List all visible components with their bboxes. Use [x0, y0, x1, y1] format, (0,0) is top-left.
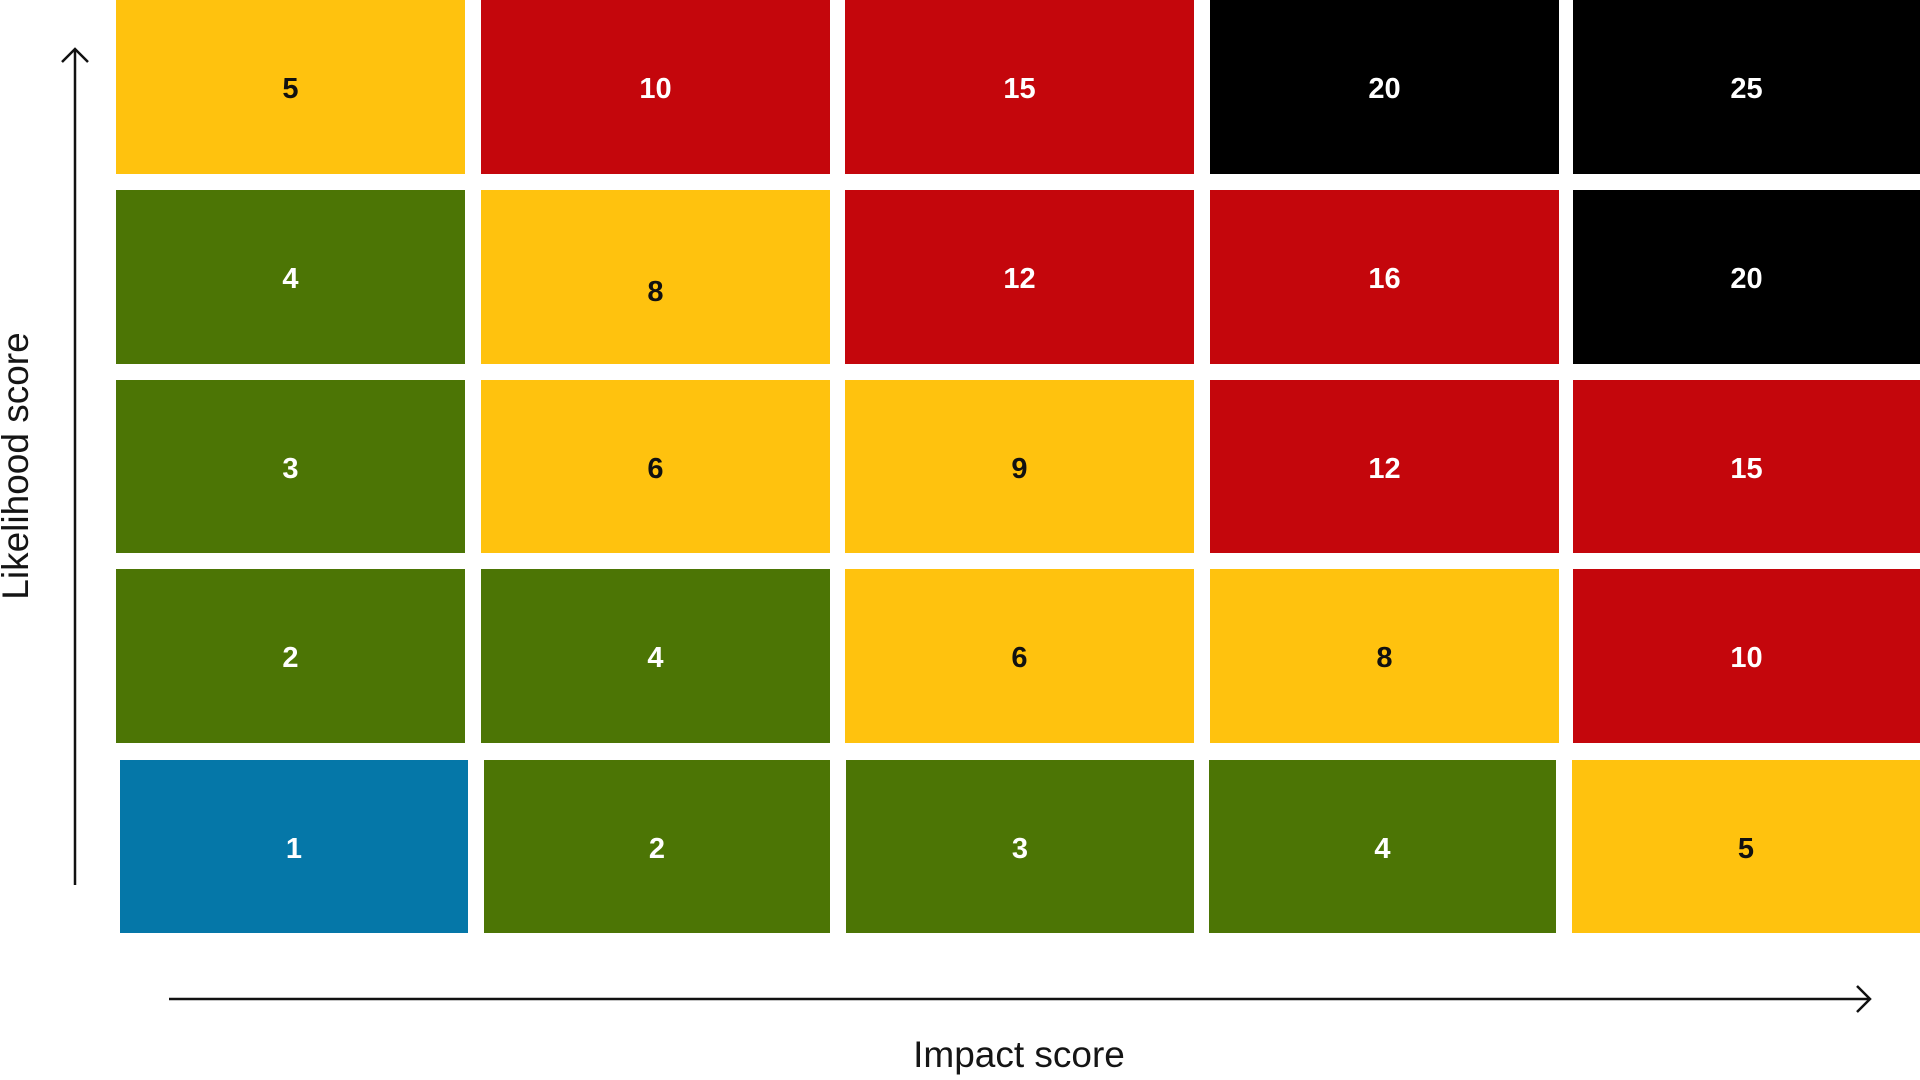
cell r1c4: 4 [1374, 832, 1391, 864]
cell r2c5 [1573, 569, 1920, 743]
cell r4c1 [116, 190, 465, 364]
cell r3c1: 3 [282, 452, 299, 484]
label: impact score: Impact score [913, 1034, 1125, 1075]
cell r1c2 [484, 760, 830, 933]
cell r3c4 [1210, 380, 1559, 553]
cell r2c3: 6 [1011, 642, 1028, 674]
cell r5c1: 5 [282, 73, 299, 105]
cell r4c3: 12 [1003, 263, 1036, 295]
cell r2c1: 2 [282, 642, 299, 674]
cell r4c3 [845, 190, 1194, 364]
cell r3c1 [116, 380, 465, 553]
cell r1c3 [846, 760, 1194, 933]
arrow: likelihood axis [61, 47, 89, 885]
cell r5c5: 25 [1730, 73, 1763, 105]
cell r1c5: 5 [1738, 832, 1754, 864]
cell r5c3 [845, 0, 1194, 174]
cell r2c2: 4 [647, 642, 664, 674]
cell r2c1 [116, 569, 465, 743]
cell r3c5 [1573, 380, 1920, 553]
arrow: impact axis [169, 985, 1872, 1013]
cell r4c5 [1573, 190, 1920, 364]
cell r5c4 [1210, 0, 1559, 174]
cell r2c5: 10 [1730, 642, 1763, 674]
cell r5c4: 20 [1368, 73, 1401, 105]
cell r3c3: 9 [1011, 452, 1028, 484]
cell r4c1: 4 [282, 263, 299, 295]
cell r5c1 [116, 0, 465, 174]
cell r4c4 [1210, 190, 1559, 364]
cell r3c5: 15 [1730, 452, 1763, 484]
cell r1c3: 3 [1012, 832, 1028, 864]
cell r2c3 [845, 569, 1194, 743]
cell r4c4: 16 [1368, 263, 1401, 295]
cell r5c2: 10 [639, 73, 672, 105]
cell r2c2 [481, 569, 830, 743]
cell r3c4: 12 [1368, 452, 1401, 484]
cell r2c4: 8 [1376, 642, 1393, 674]
cell r3c2: 6 [647, 452, 664, 484]
cell r5c3: 15 [1003, 73, 1036, 105]
cell r3c3 [845, 380, 1194, 553]
cell r1c4 [1209, 760, 1556, 933]
cell r4c2: 8 [647, 276, 664, 308]
cell r1c1: 1 [286, 832, 302, 864]
cell r4c5: 20 [1730, 263, 1763, 295]
cell r1c2: 2 [649, 832, 665, 864]
cell r1c1 [120, 760, 468, 933]
cell r4c2 [481, 190, 830, 364]
cell r3c2 [481, 380, 830, 553]
cell r5c2 [481, 0, 830, 174]
cell r5c5 [1573, 0, 1920, 174]
cell r2c4 [1210, 569, 1559, 743]
cell r1c5 [1572, 760, 1920, 933]
